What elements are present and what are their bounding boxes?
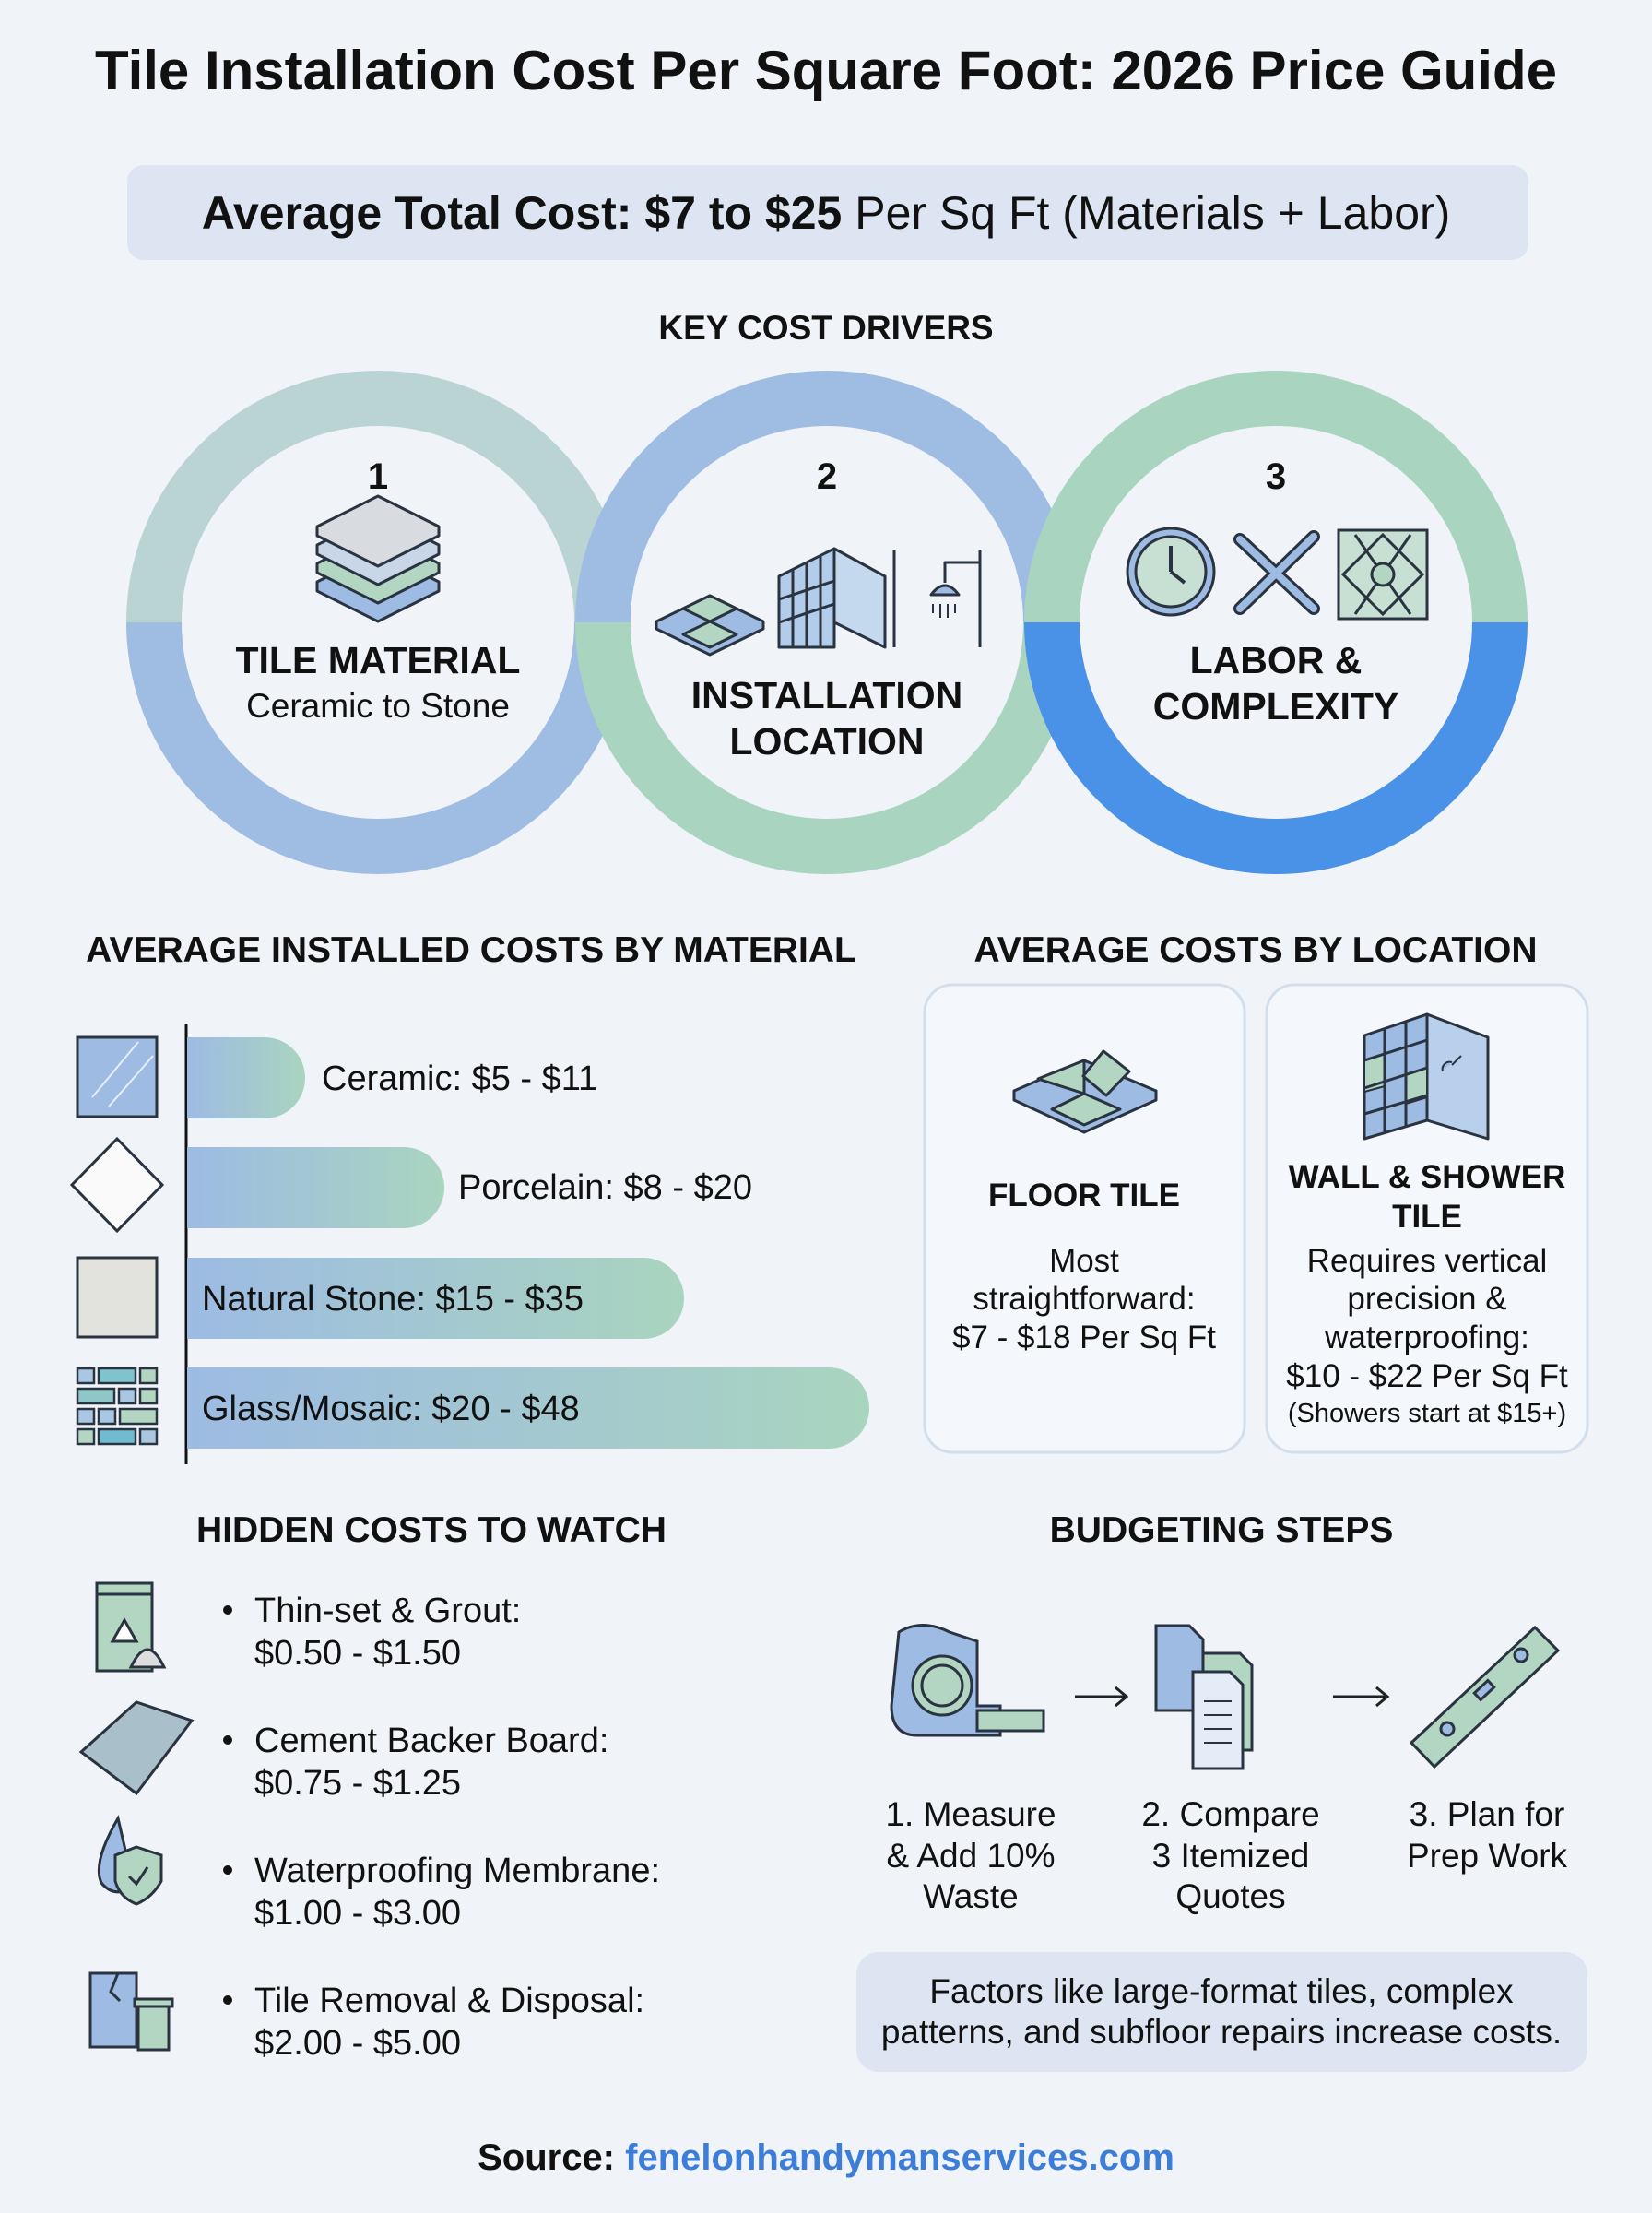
panel: wall & shower card: (Showers start at $15+) (1288, 1399, 1566, 1428)
icon: floor tile (1014, 1051, 1156, 1132)
panel: circle 2 installation location: 2 (817, 456, 837, 497)
bar: glass mosaic (77, 1367, 869, 1449)
panel: circle 3 labor & complexity: LABOR & (1190, 639, 1362, 681)
title: Tile Installation Cost Per Square Foot: 2026 Price Guide (95, 40, 1557, 101)
panel: circle 1 tile material: Ceramic to Stone (246, 687, 510, 725)
icon: wall & shower (1364, 1014, 1488, 1139)
item: thin-set grout: $0.50 - $1.50 (254, 1634, 461, 1673)
budgeting steps (885, 1625, 1568, 1915)
item: backer board (81, 1702, 608, 1803)
item: thin-set grout (97, 1583, 521, 1673)
step labels: 1. Measure (885, 1795, 1056, 1833)
item: tile removal: Tile Removal & Disposal: (254, 1982, 644, 2020)
arrow: step 1 to 2 (1075, 1687, 1127, 1706)
bar: natural stone (77, 1258, 684, 1339)
step labels (885, 1795, 1568, 1915)
bar: ceramic: Ceramic: $5 - $11 (322, 1059, 597, 1098)
icon: tile stack (317, 496, 439, 621)
item: tile removal (90, 1973, 644, 2063)
icon: floor wall shower (656, 549, 980, 655)
item: tile removal: $2.00 - $5.00 (254, 2024, 461, 2063)
panel: circle 2 installation location (603, 398, 1051, 846)
source: Source: fenelonhandymanservices.com (478, 2137, 1174, 2178)
panel: wall & shower card: precision & (1347, 1281, 1507, 1317)
panel: floor tile card (925, 985, 1245, 1452)
panel: circle 1 tile material: TILE MATERIAL (236, 639, 520, 681)
item: backer board: Cement Backer Board: (254, 1722, 608, 1760)
step labels: Prep Work (1407, 1837, 1568, 1875)
heading: costs by location: AVERAGE COSTS BY LOCATION (974, 930, 1538, 970)
bar: glass mosaic: Glass/Mosaic: $20 - $48 (202, 1390, 580, 1428)
panel: floor tile card: $7 - $18 Per Sq Ft (952, 1320, 1216, 1355)
panel: circle 3 labor & complexity: 3 (1266, 456, 1286, 497)
arrow: step 2 to 3 (1333, 1687, 1387, 1706)
panel: circle 3 labor & complexity (1052, 398, 1500, 846)
panel: circle 2 installation location: INSTALLATION (691, 674, 962, 716)
heading: budgeting steps: BUDGETING STEPS (1050, 1510, 1393, 1550)
panel: wall & shower card: Requires vertical (1307, 1243, 1547, 1279)
item: thin-set grout: Thin-set & Grout: (254, 1592, 521, 1630)
heading: costs by material: AVERAGE INSTALLED COSTS BY MATERIAL (86, 930, 856, 970)
callout: factors note: Factors like large-format tiles, complex (929, 1972, 1514, 2010)
bar: porcelain: Porcelain: $8 - $20 (458, 1168, 752, 1207)
step labels: & Add 10% (886, 1837, 1056, 1875)
panel: circle 1 tile material: 1 (368, 456, 388, 497)
panel: wall & shower card: waterproofing: (1324, 1320, 1529, 1355)
bar: porcelain (72, 1139, 752, 1231)
icon: documents (1156, 1626, 1252, 1769)
panel: circle 2 installation location: LOCATION (729, 720, 925, 763)
callout: factors note (856, 1952, 1587, 2072)
bar chart: material costs (72, 1024, 869, 1464)
panel: floor tile card: FLOOR TILE (988, 1178, 1180, 1213)
item: waterproofing: Waterproofing Membrane: (254, 1852, 660, 1890)
panel: wall & shower card: TILE (1392, 1199, 1462, 1235)
banner: average total cost: Average Total Cost: $7 to $25 Per Sq Ft (Materials + Labor) (202, 187, 1450, 239)
heading: key cost drivers: KEY COST DRIVERS (658, 309, 994, 347)
panel: floor tile card: straightforward: (973, 1281, 1196, 1317)
panel: floor tile card: Most (1049, 1243, 1119, 1279)
step labels: 3. Plan for (1410, 1795, 1564, 1833)
panel: circle 1 tile material (154, 398, 602, 846)
panel: circle 3 labor & complexity: COMPLEXITY (1153, 685, 1398, 728)
item: backer board: $0.75 - $1.25 (254, 1764, 461, 1803)
item: waterproofing (99, 1818, 660, 1933)
icon: level (1411, 1627, 1558, 1767)
list: hidden costs (81, 1583, 660, 2063)
step labels: Quotes (1175, 1877, 1286, 1915)
heading: hidden costs: HIDDEN COSTS TO WATCH (196, 1510, 667, 1550)
icon: clock tools pattern (1127, 528, 1427, 619)
banner: average total cost (127, 165, 1528, 260)
item: waterproofing: $1.00 - $3.00 (254, 1894, 461, 1933)
panel: wall & shower card: $10 - $22 Per Sq Ft (1286, 1358, 1568, 1394)
step labels: 2. Compare (1141, 1795, 1320, 1833)
panel: wall & shower card (1267, 985, 1587, 1452)
icon: tape measure (891, 1625, 1044, 1735)
panel: wall & shower card: WALL & SHOWER (1289, 1159, 1565, 1195)
bar: ceramic (77, 1037, 597, 1118)
bar: natural stone: Natural Stone: $15 - $35 (202, 1280, 584, 1319)
callout: factors note: patterns, and subfloor repairs increase costs. (881, 2013, 1562, 2051)
step labels: Waste (923, 1877, 1019, 1915)
step labels: 3 Itemized (1152, 1837, 1309, 1875)
